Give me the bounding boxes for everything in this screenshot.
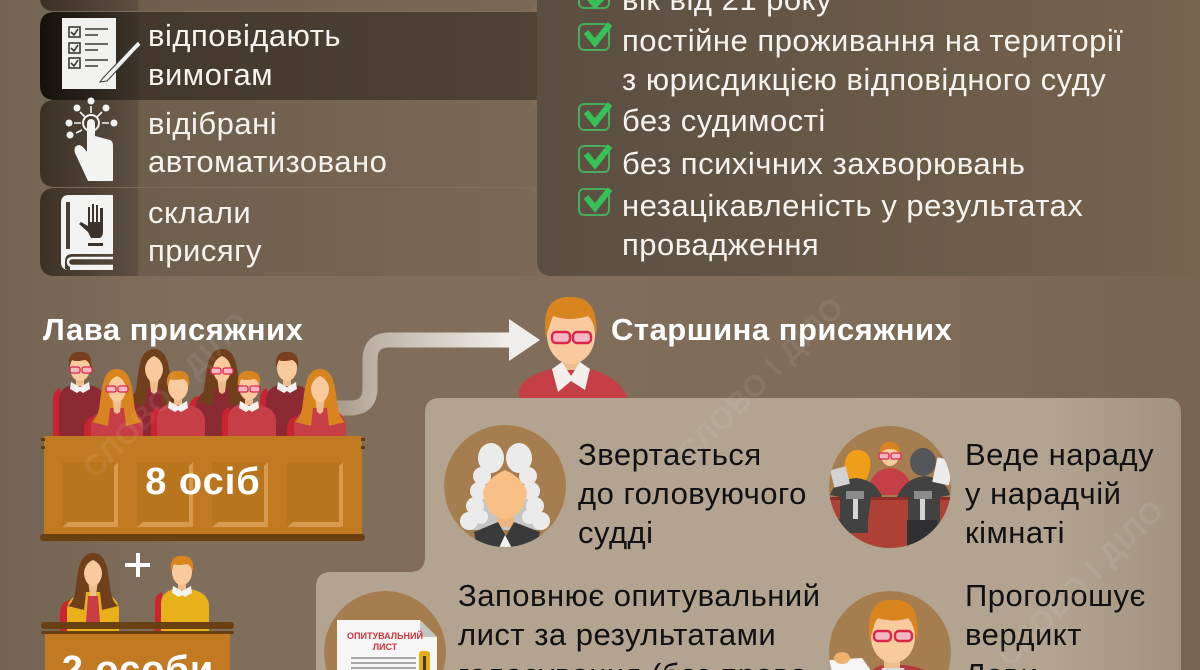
duty: address the judge [444,425,807,552]
duty: lead deliberation: у нарадчій [965,476,1121,511]
panel: selected automatically: відібрані [148,106,277,141]
panel: took oath: присягу [148,233,262,268]
checklist item: residence: з юрисдикцією відповідного суду [622,62,1106,97]
checklist item: residence: постійне проживання на території [622,23,1123,58]
plus sign [125,553,150,577]
duty: address the judge: до головуючого [578,476,807,511]
watermark [552,0,1106,105]
checklist item: no interest [579,188,1083,262]
duty: address the judge: судді [578,515,654,550]
checklist item: no convictions: без судимості [622,103,826,138]
icon: questionnaire: ЛИСТ [373,642,398,652]
count: 8 persons: 8 осіб [145,461,261,503]
checklist item: residence [579,23,1123,97]
duty: address the judge: Звертається [578,437,762,472]
checklist item: no interest: провадження [622,227,819,262]
icon: meeting room [829,426,954,554]
panel: meet requirements [40,12,537,100]
reserve jurors [60,553,209,640]
panel: selected automatically: автоматизовано [148,144,387,179]
panel: took oath [40,188,537,276]
panel: selected automatically [40,98,537,187]
watermark [77,291,1171,670]
icon: questionnaire [324,591,446,670]
jury group [53,349,346,456]
panel: meet requirements: відповідають [148,18,341,53]
heading: jury bench: Лава присяжних [43,312,304,347]
checklist item: no interest: незацікавленість у результатах [622,188,1083,223]
icon: book with hand [61,195,113,270]
duty: announce verdict [829,578,1146,670]
panel: top clipped row [40,0,537,11]
panel: meet requirements: вимогам [148,57,273,92]
jury bench [40,436,365,541]
duty: lead deliberation [829,426,1154,554]
arrow: jury to foreperson [336,319,540,408]
icon: judge [444,425,566,552]
duty: lead deliberation: Веде нараду [965,437,1154,472]
panel: requirements list [537,0,1200,276]
icon: touching hand [66,98,118,181]
reserve bench [41,622,234,670]
person: front row [84,369,346,456]
watermark: СЛОВО І ДІЛО [992,494,1171,670]
duty: announce verdict: Проголошує [965,578,1146,613]
panel: foreperson duties [316,398,1181,670]
duty: lead deliberation: кімнаті [965,515,1065,550]
duty: announce verdict: вердикт [965,617,1082,652]
duty: fill in questionnaire [324,578,821,670]
duty: fill in questionnaire: Заповнює опитувальний [458,578,821,613]
person: back row [53,349,314,436]
watermark: СЛОВО І ДІЛО [77,306,256,485]
checklist item: no mental illness: без психічних захворювань [622,146,1025,181]
heading: foreperson: Старшина присяжних [611,312,953,347]
watermark: СЛОВО І ДІЛО [672,291,851,470]
icon: foreperson with verdict [829,591,951,670]
foreperson figure [519,297,628,398]
icon: questionnaire: ОПИТУВАЛЬНИЙ [347,630,423,641]
duty: fill in questionnaire: лист за результатами [458,617,776,652]
icon: checklist with pencil [62,18,141,89]
panel: took oath: склали [148,195,251,230]
